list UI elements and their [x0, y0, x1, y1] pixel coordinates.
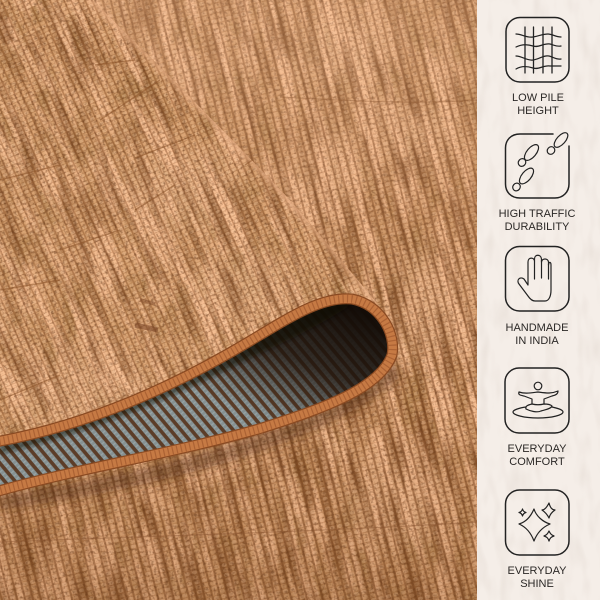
feature panel — [477, 0, 600, 600]
label: everyday comfort: EVERYDAY — [508, 443, 567, 455]
label: everyday comfort: COMFORT — [509, 456, 565, 468]
orange rug binding edge — [0, 299, 393, 492]
feature: everyday shine — [506, 490, 569, 590]
icon: woven pile — [506, 18, 569, 82]
label: everyday shine: EVERYDAY — [508, 565, 567, 577]
folded rug flap — [0, 0, 400, 450]
label: high traffic durability: DURABILITY — [505, 221, 570, 233]
rug surface background — [0, 0, 477, 600]
icon: meditating figure — [505, 368, 569, 433]
feature: low pile height — [506, 18, 569, 117]
feature: handmade in India — [506, 246, 569, 347]
label: handmade in India: IN INDIA — [515, 335, 559, 347]
label: high traffic durability: HIGH TRAFFIC — [499, 208, 575, 220]
label: handmade in India: HANDMADE — [506, 322, 568, 334]
feature: high traffic durability — [499, 130, 575, 233]
label: everyday shine: SHINE — [520, 578, 554, 590]
icon: sparkles — [506, 490, 569, 555]
feature: everyday comfort — [505, 368, 569, 468]
icon: open hand — [506, 246, 569, 311]
icon: footprints — [506, 130, 570, 198]
shadow under the fold — [0, 362, 402, 510]
label: low pile height: LOW PILE — [512, 92, 564, 104]
label: low pile height: HEIGHT — [517, 105, 559, 117]
rug underside visible in the fold — [0, 304, 388, 485]
